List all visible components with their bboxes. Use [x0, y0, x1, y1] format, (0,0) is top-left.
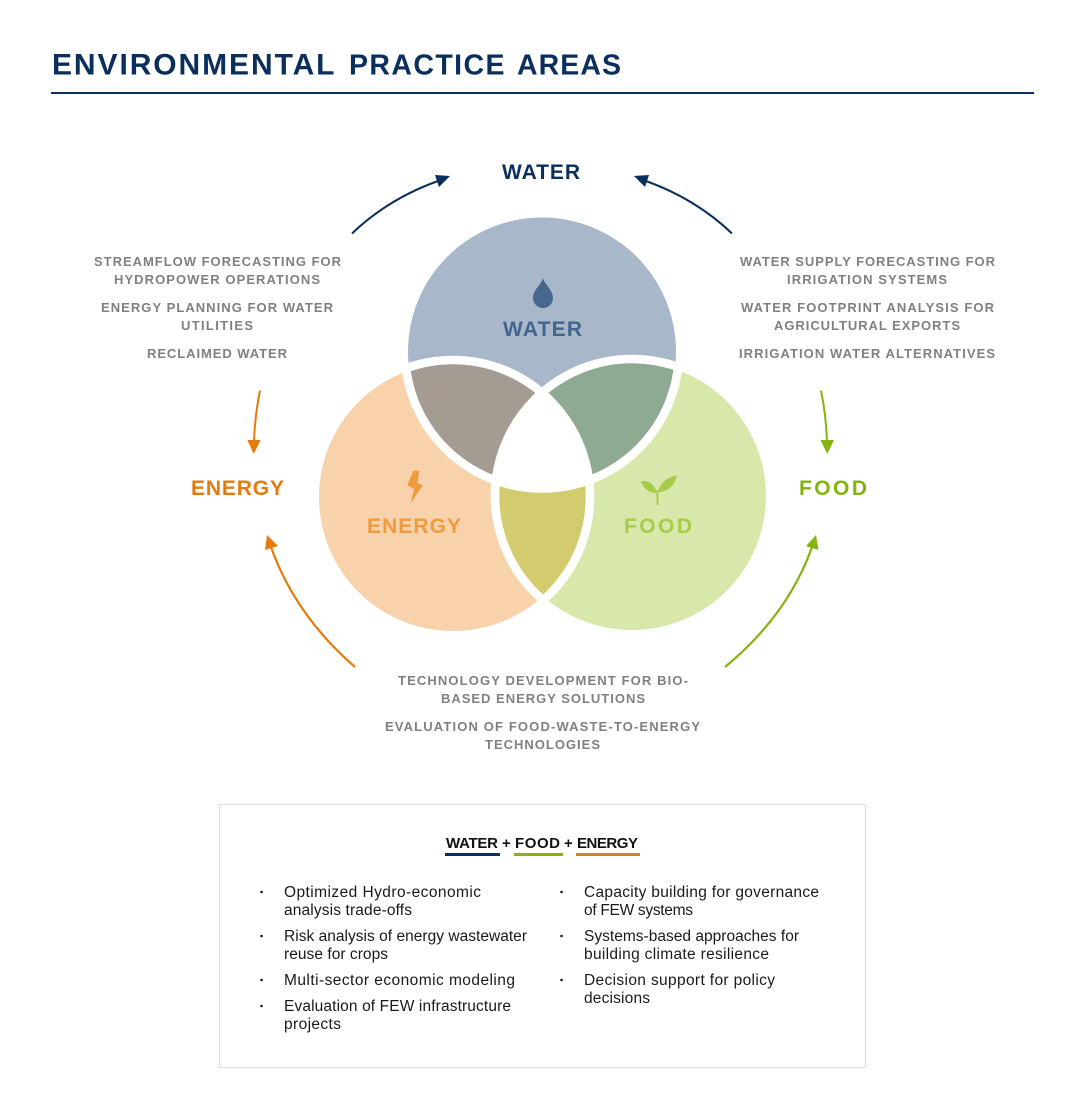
- bullet list: left column: Multi-sector economic modeling: [284, 972, 515, 989]
- text block: food and energy: EVALUATION OF FOOD-WASTE-TO-ENERGY: [385, 719, 700, 734]
- text block: water and food: IRRIGATION WATER ALTERNATIVES: [739, 346, 995, 361]
- bullet list: right column: [560, 884, 819, 1007]
- bullet list: left column: [260, 884, 527, 1033]
- text block: water and food: WATER FOOTPRINT ANALYSIS FOR: [741, 300, 995, 315]
- bullet list: left column: Risk analysis of energy wastewater: [284, 928, 527, 945]
- panel heading: ENERGY: [577, 835, 638, 852]
- bullet list: left column: reuse for crops: [284, 946, 388, 963]
- overlap: center: [500, 398, 584, 484]
- panel heading: +: [564, 835, 573, 852]
- title: AREAS: [517, 50, 621, 82]
- heading: energy: ENERGY: [191, 477, 284, 500]
- bullet list: right column: Capacity building for governance: [584, 884, 819, 901]
- energy label: ENERGY: [367, 515, 461, 538]
- food label: FOOD: [624, 515, 692, 538]
- text block: water and energy: UTILITIES: [181, 318, 253, 333]
- text block: water and food: WATER SUPPLY FORECASTING FOR: [740, 254, 996, 269]
- bullet list: left column: projects: [284, 1016, 341, 1033]
- title: ENVIRONMENTAL: [52, 48, 334, 82]
- panel heading: [445, 835, 640, 856]
- water label: WATER: [503, 318, 582, 341]
- arrow: food to energy: [265, 535, 355, 667]
- text block: water and energy: ENERGY PLANNING FOR WATER: [101, 300, 334, 315]
- arrow: food to water: [634, 175, 732, 234]
- overlap: energy and food: [499, 486, 586, 594]
- panel: water food energy: [220, 804, 866, 1068]
- text block: water and energy: RECLAIMED WATER: [147, 346, 288, 361]
- bullet list: left column: Evaluation of FEW infrastructure: [284, 998, 511, 1015]
- arrow: water to food: [820, 390, 834, 454]
- circle: water: [408, 218, 676, 486]
- title: [51, 48, 1034, 94]
- text block: water and energy: STREAMFLOW FORECASTING FOR: [94, 254, 342, 269]
- text block: food and energy: BASED ENERGY SOLUTIONS: [441, 691, 645, 706]
- panel heading: WATER: [446, 835, 498, 852]
- text block: food and energy: TECHNOLOGY DEVELOPMENT FOR BIO-: [398, 673, 688, 688]
- bullet list: right column: building climate resilience: [584, 946, 769, 963]
- icon: lightning bolt: [407, 471, 423, 503]
- heading: food: FOOD: [799, 477, 867, 500]
- overlap: water and food: [548, 363, 674, 474]
- panel heading: FOOD: [515, 835, 560, 852]
- text block: food and energy: TECHNOLOGIES: [485, 737, 600, 752]
- arrow: energy to water: [352, 175, 450, 234]
- icon: water drop: [533, 278, 553, 308]
- circle: food: [498, 362, 766, 630]
- panel heading: +: [502, 835, 511, 852]
- bullet list: right column: Systems-based approaches for: [584, 928, 799, 945]
- text block: food and energy: [385, 673, 700, 752]
- text block: water and energy: [94, 254, 342, 361]
- white ring outlines: [402, 354, 682, 601]
- title: PRACTICE: [349, 50, 504, 82]
- text block: water and energy: HYDROPOWER OPERATIONS: [114, 272, 320, 287]
- arrow: water to energy: [247, 390, 261, 454]
- venn diagram: [319, 218, 766, 631]
- text block: water and food: IRRIGATION SYSTEMS: [787, 272, 947, 287]
- bullet list: right column: of FEW systems: [584, 902, 693, 919]
- bullet list: right column: Decision support for policy: [584, 972, 775, 989]
- bullet list: left column: analysis trade-offs: [284, 902, 412, 919]
- heading: water: WATER: [502, 161, 580, 184]
- overlap: water and energy: [410, 364, 536, 474]
- bullet list: right column: decisions: [584, 990, 650, 1007]
- icon: sprout: [641, 475, 677, 505]
- arrow: energy to food: [725, 535, 818, 667]
- circle: energy: [319, 363, 587, 631]
- bullet list: left column: Optimized Hydro-economic: [284, 884, 481, 901]
- text block: water and food: [739, 254, 996, 361]
- text block: water and food: AGRICULTURAL EXPORTS: [774, 318, 960, 333]
